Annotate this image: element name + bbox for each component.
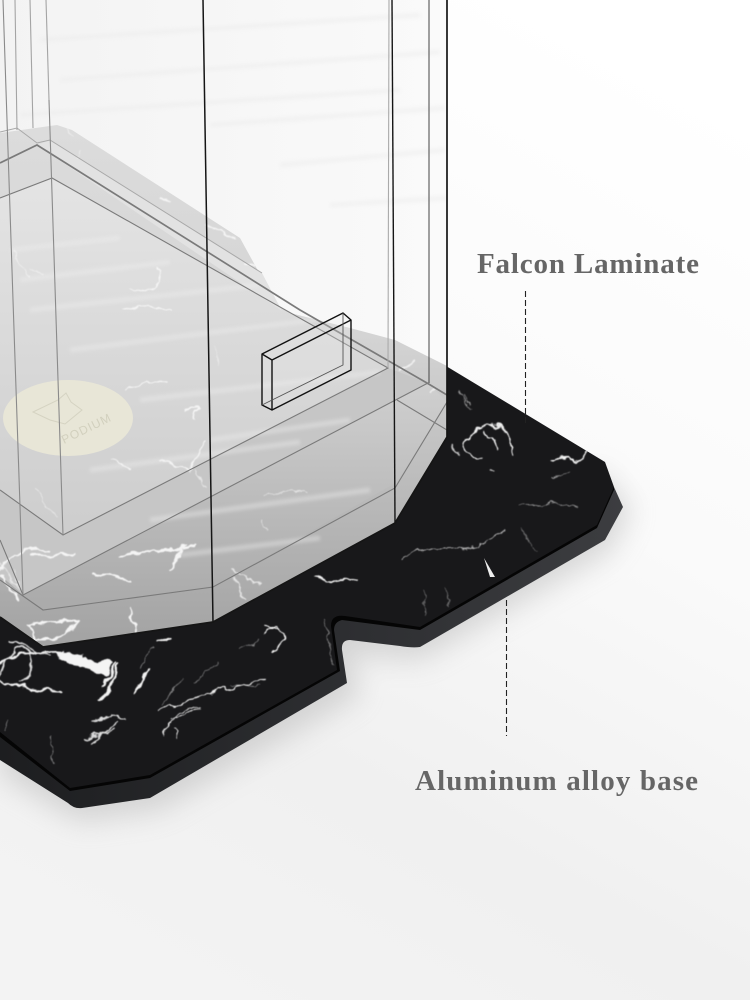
label: Aluminum alloy base: Aluminum alloy base — [415, 765, 698, 797]
translucent plate under glass — [0, 125, 447, 647]
marble top surface — [0, 366, 614, 788]
white sliver vein — [484, 558, 495, 577]
leader line: Aluminum alloy base — [506, 600, 508, 736]
small transparent block — [262, 313, 351, 410]
podium side faces — [0, 368, 396, 594]
logo wordmark: PODIUM — [59, 410, 114, 447]
logo disc — [3, 380, 133, 456]
marble veins on top surface — [0, 392, 587, 765]
glass streak texture — [20, 15, 447, 205]
black gap line — [0, 487, 614, 791]
glass vertical grey edges — [3, 0, 389, 595]
podium top surface — [0, 178, 388, 535]
glass backdrop — [0, 0, 447, 647]
lighter band along back edge — [37, 140, 282, 311]
podium ring — [0, 368, 428, 595]
marble veins through glass — [0, 128, 437, 640]
plate shadow — [0, 470, 632, 822]
glass interior outlines — [0, 128, 447, 610]
leader line: Falcon Laminate — [524, 291, 526, 426]
label: Falcon Laminate: Falcon Laminate — [477, 248, 699, 280]
glass dark edges — [0, 0, 447, 647]
surface streaks — [92, 319, 378, 558]
logo mark — [33, 393, 82, 424]
aluminum alloy base side — [0, 487, 623, 808]
